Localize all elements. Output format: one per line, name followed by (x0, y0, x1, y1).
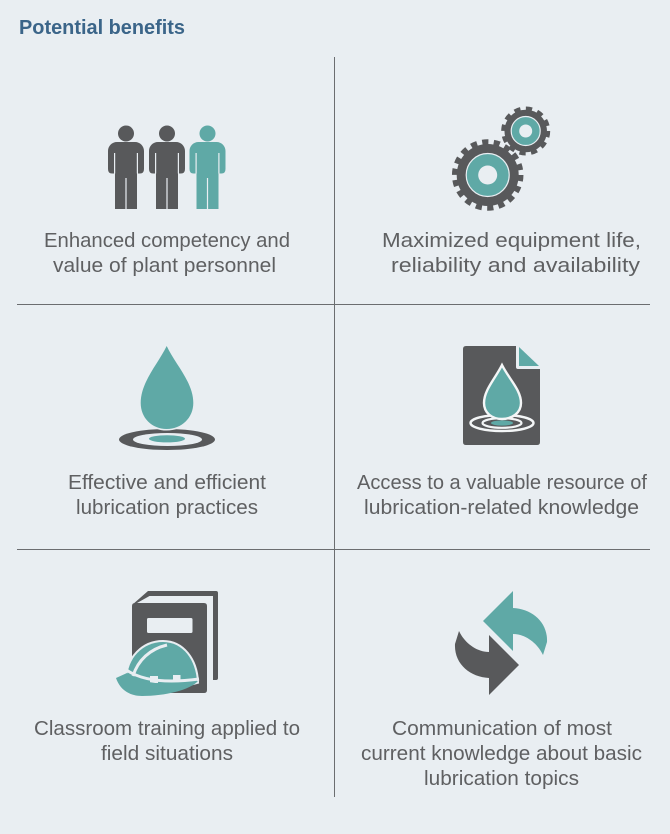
text: resource (357, 471, 647, 519)
text: resource: Access to a valuable resource of (357, 471, 647, 494)
text: communication: lubrication topics (424, 767, 579, 790)
icon: book and hard hat (116, 591, 218, 696)
text: communication: Communication of most (392, 717, 612, 740)
text: practices (68, 471, 266, 519)
text: classroom: Classroom training applied to (34, 717, 300, 740)
text: equipment: Maximized equipment life, (382, 229, 641, 252)
icon: exchange arrows (455, 591, 547, 695)
text: communication: current knowledge about basic (361, 742, 642, 765)
text: personnel (44, 229, 290, 277)
icon: three people (108, 126, 226, 209)
text: personnel: value of plant personnel (53, 254, 276, 277)
text: classroom (34, 717, 300, 765)
text: communication (361, 717, 642, 790)
text: classroom: field situations (101, 742, 233, 765)
text: resource: lubrication-related knowledge (364, 496, 639, 519)
text: equipment: reliability and availability (391, 254, 641, 277)
text: practices: Effective and efficient (68, 471, 266, 494)
icon: document with drop (463, 346, 540, 445)
title: Potential benefits (19, 17, 185, 39)
text: practices: lubrication practices (76, 496, 258, 519)
text: equipment (382, 229, 641, 277)
text: personnel: Enhanced competency and (44, 229, 290, 252)
icon: gears (455, 108, 548, 208)
icon: oil drop on ring (119, 346, 215, 450)
